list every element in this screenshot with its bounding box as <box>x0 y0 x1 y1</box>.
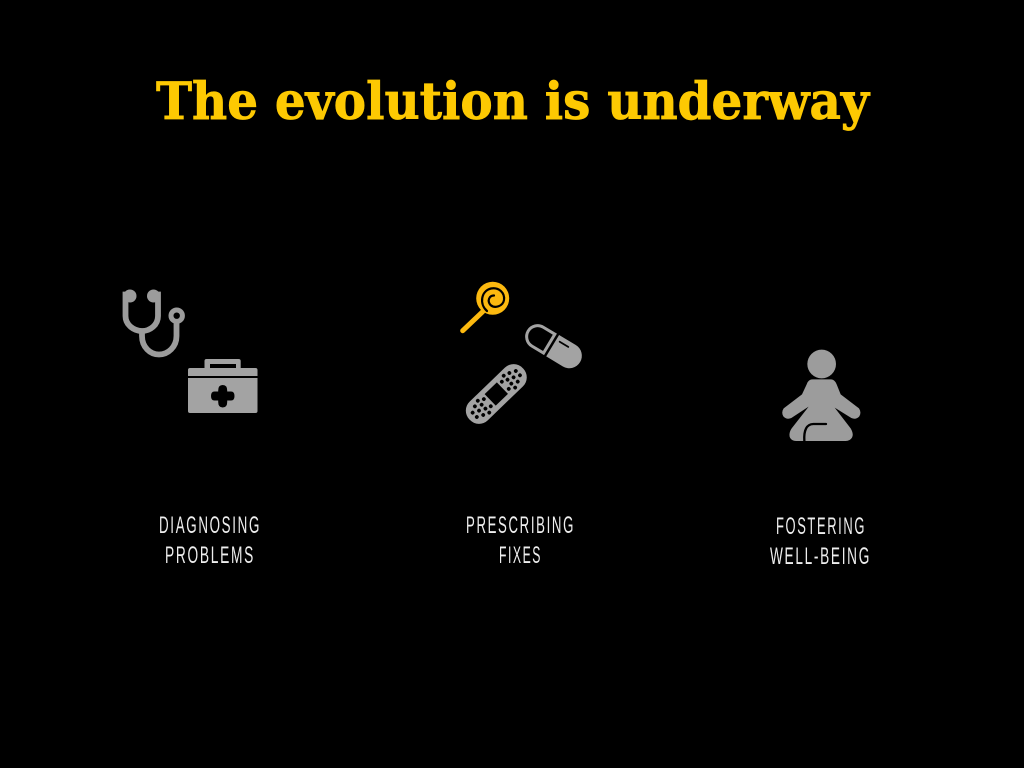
label: diagnosing problems <box>159 512 261 569</box>
label: prescribing fixes: FIXES <box>499 542 542 569</box>
label: prescribing fixes <box>466 512 575 569</box>
icon: medical kit <box>188 359 258 413</box>
label: prescribing fixes: PRESCRIBING <box>466 512 575 539</box>
icon: capsule <box>522 320 587 373</box>
icon: stethoscope <box>124 290 182 354</box>
label: diagnosing problems: PROBLEMS <box>165 542 255 569</box>
label: diagnosing problems: DIAGNOSING <box>159 512 261 539</box>
icon: bandage <box>461 359 532 429</box>
title: The evolution is underway <box>156 72 870 132</box>
label: fostering well-being: WELL-BEING <box>770 543 871 570</box>
icon: lollipop <box>463 282 509 331</box>
icon: meditating person <box>782 350 860 441</box>
label: fostering well-being: FOSTERING <box>776 513 866 540</box>
label: fostering well-being <box>770 513 871 570</box>
